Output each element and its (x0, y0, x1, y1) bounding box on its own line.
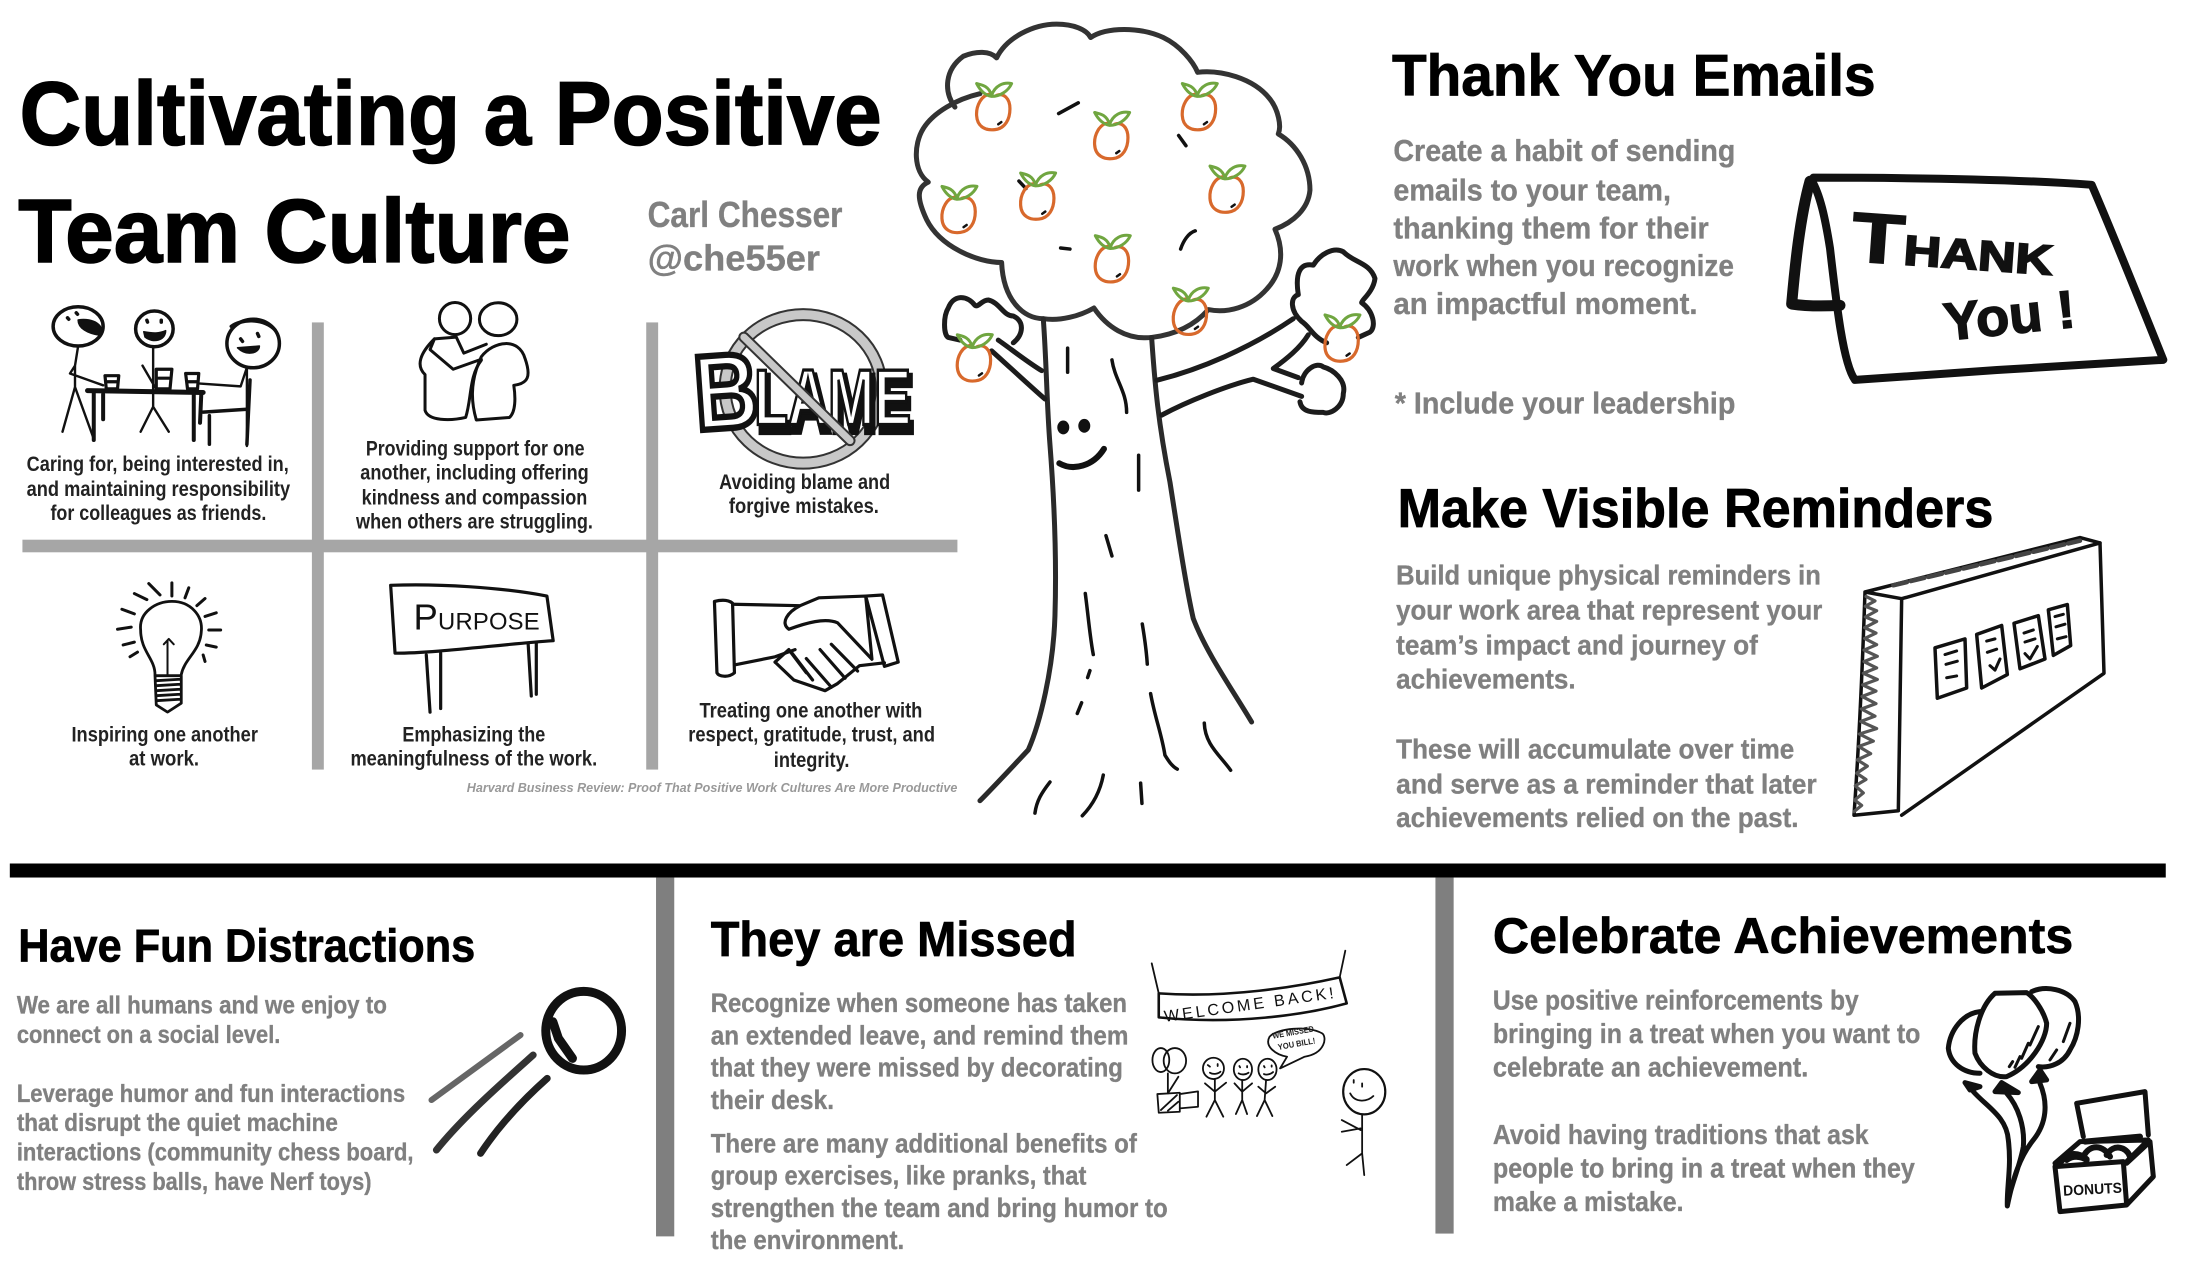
icon: thank you card (1792, 178, 2163, 380)
caption: inspiring (71, 724, 258, 770)
body text: work when you recognize (1392, 248, 1734, 283)
body text: achievements relied on the past. (1396, 802, 1798, 833)
body text: strengthen the team and bring humor to (711, 1193, 1168, 1223)
icon: balloons and donut box: DONUTS (2063, 1181, 2123, 1200)
panel: have fun distractions (17, 920, 622, 1196)
caption: support: Providing support for one (366, 438, 585, 461)
body text: your work area that represent your (1396, 595, 1822, 626)
caption: support: when others are struggling. (355, 510, 593, 533)
body text: people to bring in a treat when they (1493, 1153, 1916, 1184)
caption: caring: for colleagues as friends. (50, 502, 266, 525)
caption: caring: Caring for, being interested in, (27, 453, 289, 476)
body text: interactions (community chess board, (17, 1139, 414, 1167)
panel: celebrate achievements (1493, 907, 2153, 1217)
body text: an impactful moment. (1393, 286, 1698, 321)
body text (711, 988, 1168, 1255)
caption: avoiding blame: Avoiding blame and (719, 471, 890, 494)
body text: that they were missed by decorating (711, 1053, 1123, 1083)
heading: Make Visible Reminders (1398, 478, 1993, 539)
lower panel dividers (656, 878, 1454, 1236)
icon: no blame: B (690, 330, 763, 453)
body text: their desk. (711, 1085, 834, 1115)
icon: no blame (690, 315, 914, 463)
title (18, 64, 882, 282)
caption: respect (688, 700, 935, 772)
body text (1396, 560, 1822, 833)
body text: Build unique physical reminders in (1396, 560, 1821, 591)
icon: two people supporting each other (420, 302, 528, 420)
caption: meaningfulness (350, 724, 597, 770)
icon: balloons and donut box (1948, 989, 2153, 1212)
icon: purpose sign (391, 585, 553, 712)
panel: six culture characteristics grid (22, 302, 958, 795)
branches and leaf clusters (945, 250, 1375, 415)
trunk (980, 319, 1252, 801)
caption: inspiring: at work. (129, 747, 199, 770)
body text (1392, 133, 1735, 421)
panel: thank you emails (1392, 43, 2163, 421)
panel: title and author (18, 64, 882, 282)
body text: We are all humans and we enjoy to (17, 991, 387, 1019)
illustration: smiling apple tree (916, 24, 1375, 816)
icon: flying stress ball (431, 991, 622, 1153)
heading: Thank You Emails (1392, 43, 1876, 108)
icon: thank you card: THANK (1849, 198, 2056, 290)
body text: achievements. (1396, 663, 1576, 694)
title: Team Culture (18, 182, 571, 282)
icon: light bulb (118, 583, 221, 712)
icon: welcome back scene: WELCOME BACK! (1163, 984, 1335, 1026)
body text: bringing in a treat when you want to (1493, 1018, 1920, 1049)
icon: no blame: LAME (757, 359, 914, 450)
icon: handshake (714, 595, 898, 691)
grid dividers (22, 322, 957, 770)
body text: These will accumulate over time (1396, 733, 1794, 764)
heading: They are Missed (711, 913, 1077, 967)
body text: There are many additional benefits of (711, 1128, 1137, 1158)
caption: respect: respect, gratitude, trust, and (688, 724, 935, 747)
caption: support (355, 438, 593, 533)
icon: thank you card: You ! (1941, 280, 2078, 353)
caption: inspiring: Inspiring one another (71, 724, 258, 747)
body text: Use positive reinforcements by (1493, 984, 1859, 1015)
icon: purpose sign: PURPOSE (414, 596, 540, 637)
body text: * Include your leadership (1395, 386, 1735, 421)
body text: connect on a social level. (17, 1021, 280, 1049)
tree crown (916, 24, 1310, 338)
body text: emails to your team, (1393, 172, 1671, 207)
body text: throw stress balls, have Nerf toys) (17, 1168, 371, 1196)
source citation: Harvard Business Review: Proof That Positive Work Cultures Are More Productive (467, 780, 958, 795)
body text: and serve as a reminder that later (1396, 768, 1817, 799)
caption: respect: Treating one another with (699, 700, 922, 723)
panel: they are missed (711, 913, 1385, 1255)
caption: support: kindness and compassion (362, 487, 587, 510)
heading: Have Fun Distractions (18, 920, 475, 972)
caption: caring (27, 453, 290, 525)
body text: team’s impact and journey of (1396, 630, 1758, 661)
section divider bar (10, 864, 2166, 878)
body text: the environment. (711, 1225, 904, 1255)
caption: support: another, including offering (360, 461, 589, 484)
body text: Avoid having traditions that ask (1493, 1119, 1869, 1150)
body text: an extended leave, and remind them (711, 1020, 1128, 1050)
caption: meaningfulness: meaningfulness of the work. (350, 747, 597, 770)
caption: avoiding blame: forgive mistakes. (729, 495, 879, 518)
author: Carl Chesser (648, 194, 842, 235)
body text: Recognize when someone has taken (711, 988, 1127, 1018)
icon: no blame: LAME (754, 354, 911, 442)
icon: welcome back scene: YOU BILL! (1277, 1035, 1316, 1052)
caption: caring: and maintaining responsibility (27, 478, 290, 501)
icon: welcome back scene (1152, 951, 1385, 1175)
body text: Create a habit of sending (1393, 133, 1735, 168)
body text: thanking them for their (1393, 210, 1709, 245)
caption: avoiding blame (719, 471, 890, 518)
caption: meaningfulness: Emphasizing the (402, 724, 545, 747)
body text: celebrate an achievement. (1493, 1052, 1808, 1083)
body text: Leverage humor and fun interactions (17, 1080, 405, 1108)
body text (1493, 984, 1920, 1217)
body text: group exercises, like pranks, that (711, 1161, 1086, 1191)
heading: Celebrate Achievements (1493, 907, 2073, 964)
panel: make visible reminders (1396, 478, 2104, 833)
caption: respect: integrity. (774, 749, 849, 772)
body text: that disrupt the quiet machine (17, 1109, 338, 1137)
face (1058, 422, 1068, 433)
apples (942, 83, 1360, 381)
icon: welcome back scene: WE MISSED (1271, 1024, 1315, 1041)
author (648, 194, 842, 279)
body text: make a mistake. (1493, 1186, 1684, 1217)
icon: reminder board (1854, 538, 2104, 815)
author: @che55er (648, 238, 820, 279)
icon: friends at a table (53, 307, 279, 446)
title: Cultivating a Positive (20, 64, 882, 164)
body text (17, 991, 414, 1196)
bark marks (1019, 103, 1231, 816)
